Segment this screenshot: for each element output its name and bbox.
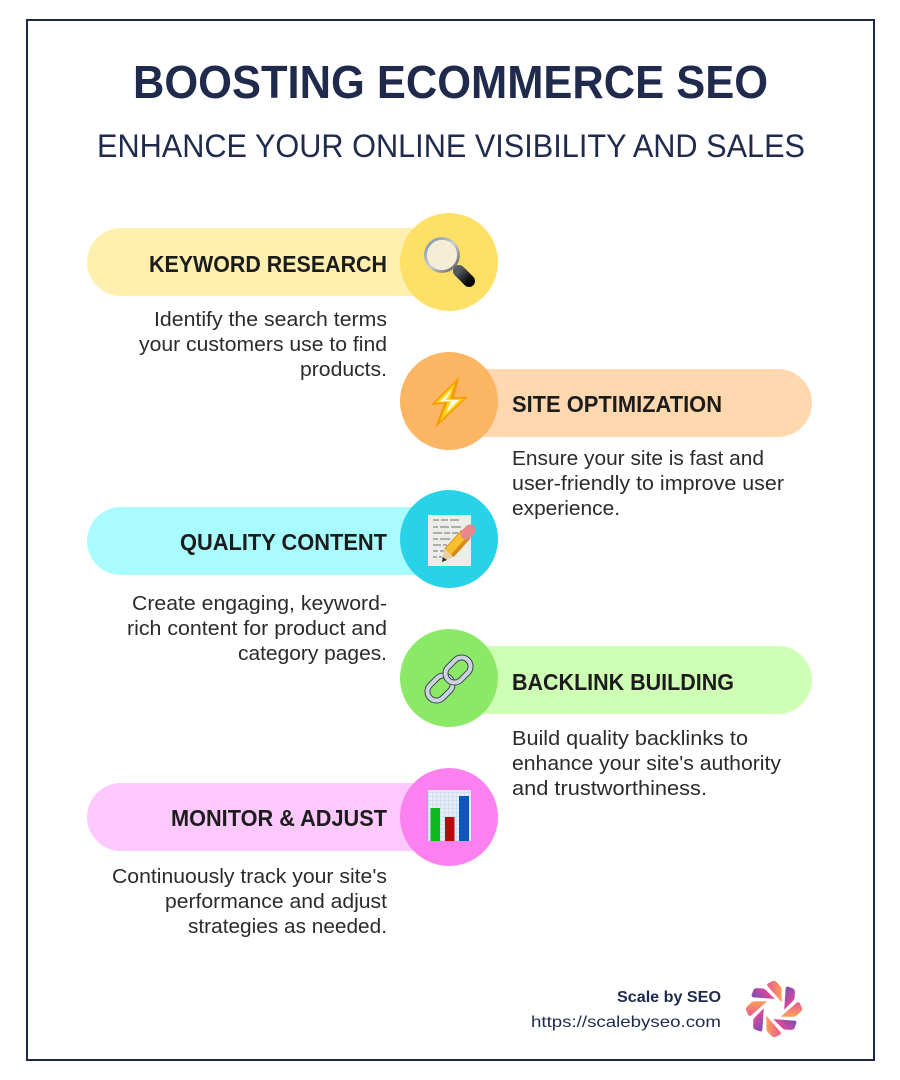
heading: keyword research: KEYWORD RESEARCH xyxy=(149,251,387,277)
text: keyword research description: products. xyxy=(300,358,387,381)
footer brand xyxy=(531,981,802,1037)
heading: monitor and adjust: MONITOR & ADJUST xyxy=(171,805,387,831)
panel: keyword research xyxy=(87,213,498,381)
icon: memo and pencil xyxy=(428,515,471,566)
text: monitor and adjust description xyxy=(112,865,387,938)
icon: bar chart xyxy=(428,790,471,841)
pill: site optimization xyxy=(449,369,812,437)
icon: chain links xyxy=(424,654,474,704)
pill: backlink building xyxy=(449,646,812,714)
brand name: Scale by SEO xyxy=(617,989,721,1006)
text: backlink building description xyxy=(512,727,782,800)
text: site optimization description: Ensure your site is fast and xyxy=(512,447,764,470)
text: keyword research description: your customers use to find xyxy=(139,333,387,356)
text: backlink building description: enhance your site's authority xyxy=(512,752,782,775)
text: keyword research description: Identify the search terms xyxy=(154,308,387,331)
badge: backlink building xyxy=(400,629,498,727)
pill: quality content xyxy=(87,507,449,575)
text: monitor and adjust description: strategies as needed. xyxy=(188,915,387,938)
panel: monitor and adjust xyxy=(87,768,498,938)
text: backlink building description: Build quality backlinks to xyxy=(512,727,748,750)
text: monitor and adjust description: Continuously track your site's xyxy=(112,865,387,888)
pill: keyword research xyxy=(87,228,449,296)
panel: site optimization xyxy=(400,352,812,520)
heading: backlink building: BACKLINK BUILDING xyxy=(512,669,734,695)
text: site optimization description xyxy=(512,447,784,520)
text: site optimization description: user-friendly to improve user xyxy=(512,472,784,495)
text: site optimization description: experience. xyxy=(512,497,620,520)
subtitle: ENHANCE YOUR ONLINE VISIBILITY AND SALES xyxy=(97,128,805,164)
brand url: https://scalebyseo.com xyxy=(531,1014,721,1031)
panel: quality content xyxy=(87,490,498,665)
badge: keyword research xyxy=(400,213,498,311)
text: quality content description: rich content for product and xyxy=(127,617,387,640)
pill: monitor and adjust xyxy=(87,783,449,851)
text: backlink building description: and trustworthiness. xyxy=(512,777,707,800)
icon: lightning bolt xyxy=(431,377,468,428)
icon: magnifying glass xyxy=(426,238,469,281)
text: quality content description: Create engaging, keyword- xyxy=(132,592,387,615)
title: BOOSTING ECOMMERCE SEO xyxy=(133,56,768,108)
text: quality content description: category pages. xyxy=(238,642,387,665)
text: quality content description xyxy=(127,592,387,665)
badge: monitor and adjust xyxy=(400,768,498,866)
panel: backlink building xyxy=(400,629,812,800)
icon: logo pinwheel xyxy=(746,981,802,1037)
text: monitor and adjust description: performance and adjust xyxy=(165,890,387,913)
text: keyword research description xyxy=(139,308,387,381)
heading: quality content: QUALITY CONTENT xyxy=(180,529,387,555)
heading: site optimization: SITE OPTIMIZATION xyxy=(512,391,722,417)
badge: site optimization xyxy=(400,352,498,450)
badge: quality content xyxy=(400,490,498,588)
